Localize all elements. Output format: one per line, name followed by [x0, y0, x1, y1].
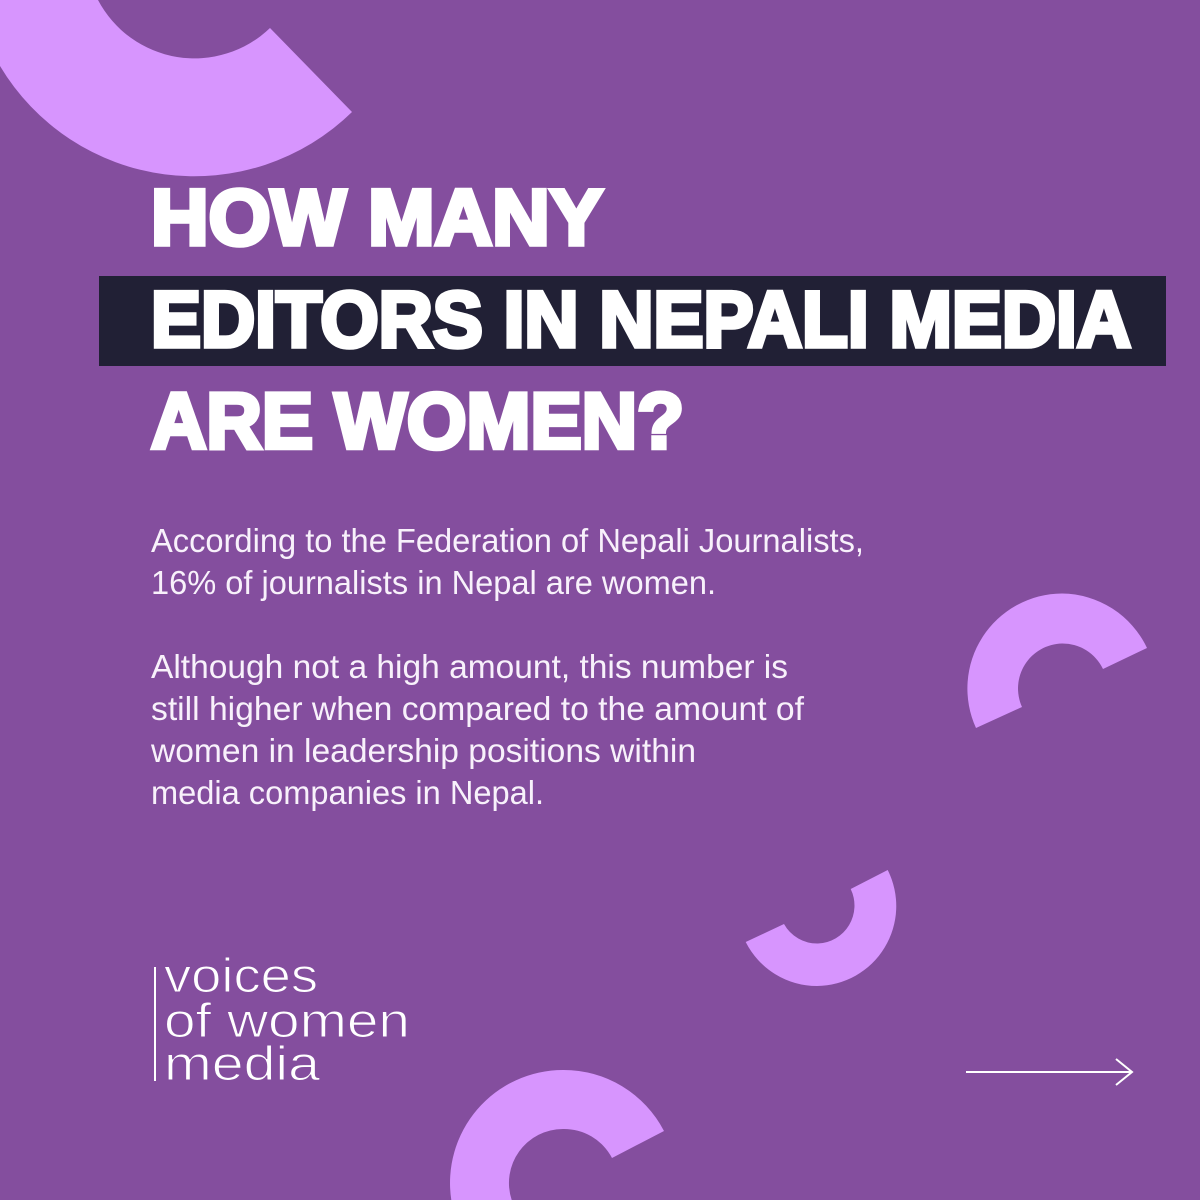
- text block: comparison: Although not a high amount, this number is: [151, 648, 788, 685]
- logo: voices of women media: voices: [164, 950, 318, 1003]
- title: ARE WOMEN?: [151, 376, 684, 465]
- arrow: [966, 1059, 1132, 1085]
- arc: right: [967, 594, 1147, 728]
- text block: comparison: [150, 648, 805, 811]
- logo: voices of women media: [154, 950, 410, 1091]
- highlight bar: [99, 276, 1166, 366]
- text block: comparison: media companies in Nepal.: [151, 774, 544, 811]
- text block: statistic: [151, 522, 864, 601]
- title: HOW MANY: [151, 172, 603, 262]
- text block: comparison: still higher when compared to the amount of: [151, 690, 805, 727]
- text block: comparison: women in leadership positions within: [150, 732, 696, 769]
- text block: statistic: According to the Federation of Nepali Journalists,: [151, 522, 864, 559]
- text block: statistic: 16% of journalists in Nepal are women.: [151, 564, 716, 601]
- logo: voices of women media: of women: [164, 995, 410, 1048]
- arc: lower middle: [746, 870, 896, 986]
- title: EDITORS IN NEPALI MEDIA: [151, 274, 1131, 364]
- logo: voices of women media: media: [164, 1038, 320, 1091]
- arc: bottom: [450, 1070, 664, 1200]
- arc: top left: [0, 0, 352, 176]
- title: [151, 172, 1131, 465]
